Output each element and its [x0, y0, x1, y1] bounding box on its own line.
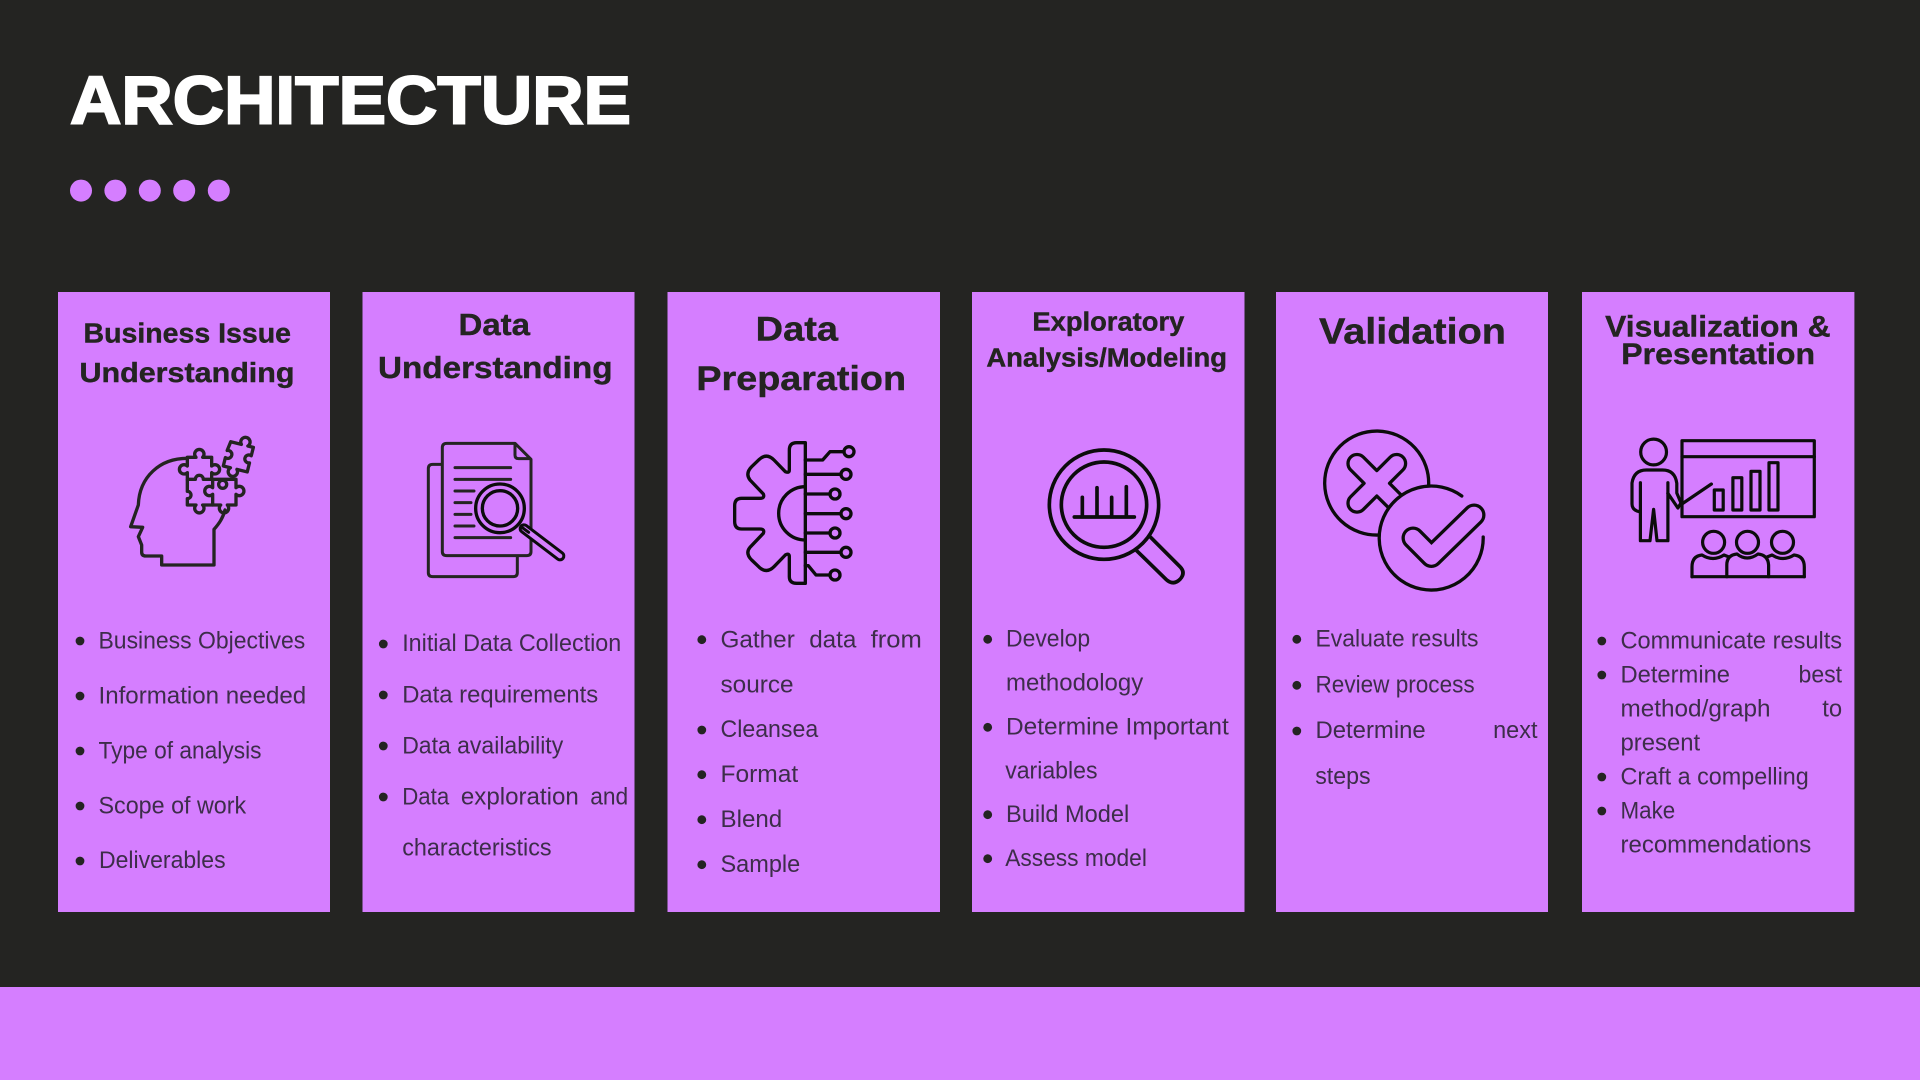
- bullet list: Review process: [1316, 671, 1475, 698]
- bullet list: Make: [1621, 797, 1675, 824]
- icon: head with puzzle pieces: [131, 434, 255, 565]
- bullet list: [1292, 626, 1538, 790]
- icon: presenter with chart and audience: [1632, 439, 1814, 577]
- bullet list: data: [809, 626, 857, 653]
- bullet list: Determine: [1621, 661, 1730, 688]
- bullet list: exploration: [461, 783, 579, 810]
- bullet list: [697, 626, 922, 878]
- heading: data preparation: Data: [756, 311, 839, 349]
- heading: validation: Validation: [1319, 310, 1506, 351]
- bullet list: Data availability: [402, 732, 564, 759]
- bullet list: variables: [1005, 757, 1098, 784]
- bullet list: Scope of work: [99, 792, 247, 819]
- panel: data preparation: [668, 292, 940, 912]
- heading: exploratory analysis/modeling: [986, 309, 1227, 373]
- bullet list: method/graph: [1621, 695, 1771, 722]
- bullet list: Gather: [720, 626, 795, 653]
- heading: business issue understanding: Business Issue: [84, 318, 291, 348]
- panel: exploratory analysis/modeling: [972, 292, 1244, 912]
- bullet list: Communicate results: [1621, 627, 1842, 654]
- bullet list: Develop: [1006, 625, 1090, 652]
- bullet list: Determine: [1316, 717, 1426, 744]
- panel: data understanding: [362, 292, 634, 912]
- icon: half gear with circuit: [735, 443, 854, 583]
- heading: data preparation: [696, 311, 906, 398]
- bullet list: Sample: [720, 851, 800, 878]
- heading: business issue understanding: Understanding: [80, 357, 294, 388]
- heading: exploratory analysis/modeling: Analysis/Modeling: [986, 345, 1227, 373]
- bullet list: Initial Data Collection: [402, 630, 621, 657]
- bullet list: Format: [720, 761, 798, 788]
- bullet list: Cleansea: [720, 716, 819, 743]
- heading: visualization and presentation: Presentation: [1621, 338, 1815, 371]
- bullet list: Information needed: [99, 682, 306, 709]
- bullet list: [983, 626, 1229, 872]
- heading: visualization and presentation: Visualization &: [1605, 311, 1831, 344]
- heading: data understanding: Understanding: [378, 351, 612, 385]
- bullet list: from: [871, 626, 922, 653]
- bullet list: methodology: [1006, 669, 1144, 696]
- heading: data preparation: Preparation: [696, 360, 906, 398]
- bullet list: Data: [402, 783, 450, 810]
- bullet list: Blend: [720, 806, 782, 833]
- icon: documents with magnifier: [428, 443, 560, 577]
- bullet list: steps: [1315, 763, 1371, 790]
- heading: data understanding: Data: [458, 308, 531, 342]
- bullet list: Evaluate results: [1316, 625, 1479, 652]
- bullet list: [379, 630, 628, 862]
- heading: exploratory analysis/modeling: Exploratory: [1032, 309, 1185, 337]
- title: ARCHITECTURE: [70, 62, 631, 138]
- icon: magnifier with bar chart: [1049, 450, 1183, 583]
- bullet list: Data requirements: [402, 681, 598, 708]
- bullet list: best: [1799, 661, 1842, 688]
- bullet list: Determine Important: [1006, 713, 1229, 740]
- icon: cross and check circles: [1324, 431, 1483, 590]
- bullet list: characteristics: [402, 834, 552, 861]
- bullet list: next: [1493, 717, 1538, 744]
- heading: visualization and presentation: [1605, 311, 1831, 371]
- decorative dots row: [70, 180, 230, 202]
- bullet list: Type of analysis: [99, 737, 261, 764]
- bullet list: to: [1822, 695, 1842, 722]
- panel: validation: [1276, 292, 1548, 912]
- panel: business issue understanding: [58, 292, 330, 912]
- panel: visualization and presentation: [1582, 292, 1854, 912]
- bullet list: Deliverables: [99, 847, 226, 874]
- heading: data understanding: [378, 308, 612, 385]
- bullet list: recommendations: [1621, 831, 1811, 858]
- bullet list: [76, 628, 306, 874]
- bullet list: Craft a compelling: [1621, 763, 1809, 790]
- bullet list: and: [590, 783, 628, 810]
- bullet list: Business Objectives: [99, 627, 305, 654]
- heading: business issue understanding: [80, 318, 294, 388]
- bullet list: present: [1621, 729, 1700, 756]
- bullet list: [1597, 628, 1842, 858]
- bullet list: Build Model: [1006, 801, 1129, 828]
- bullet list: Assess model: [1005, 845, 1147, 872]
- bullet list: source: [720, 671, 794, 698]
- footer band: [0, 987, 1920, 1080]
